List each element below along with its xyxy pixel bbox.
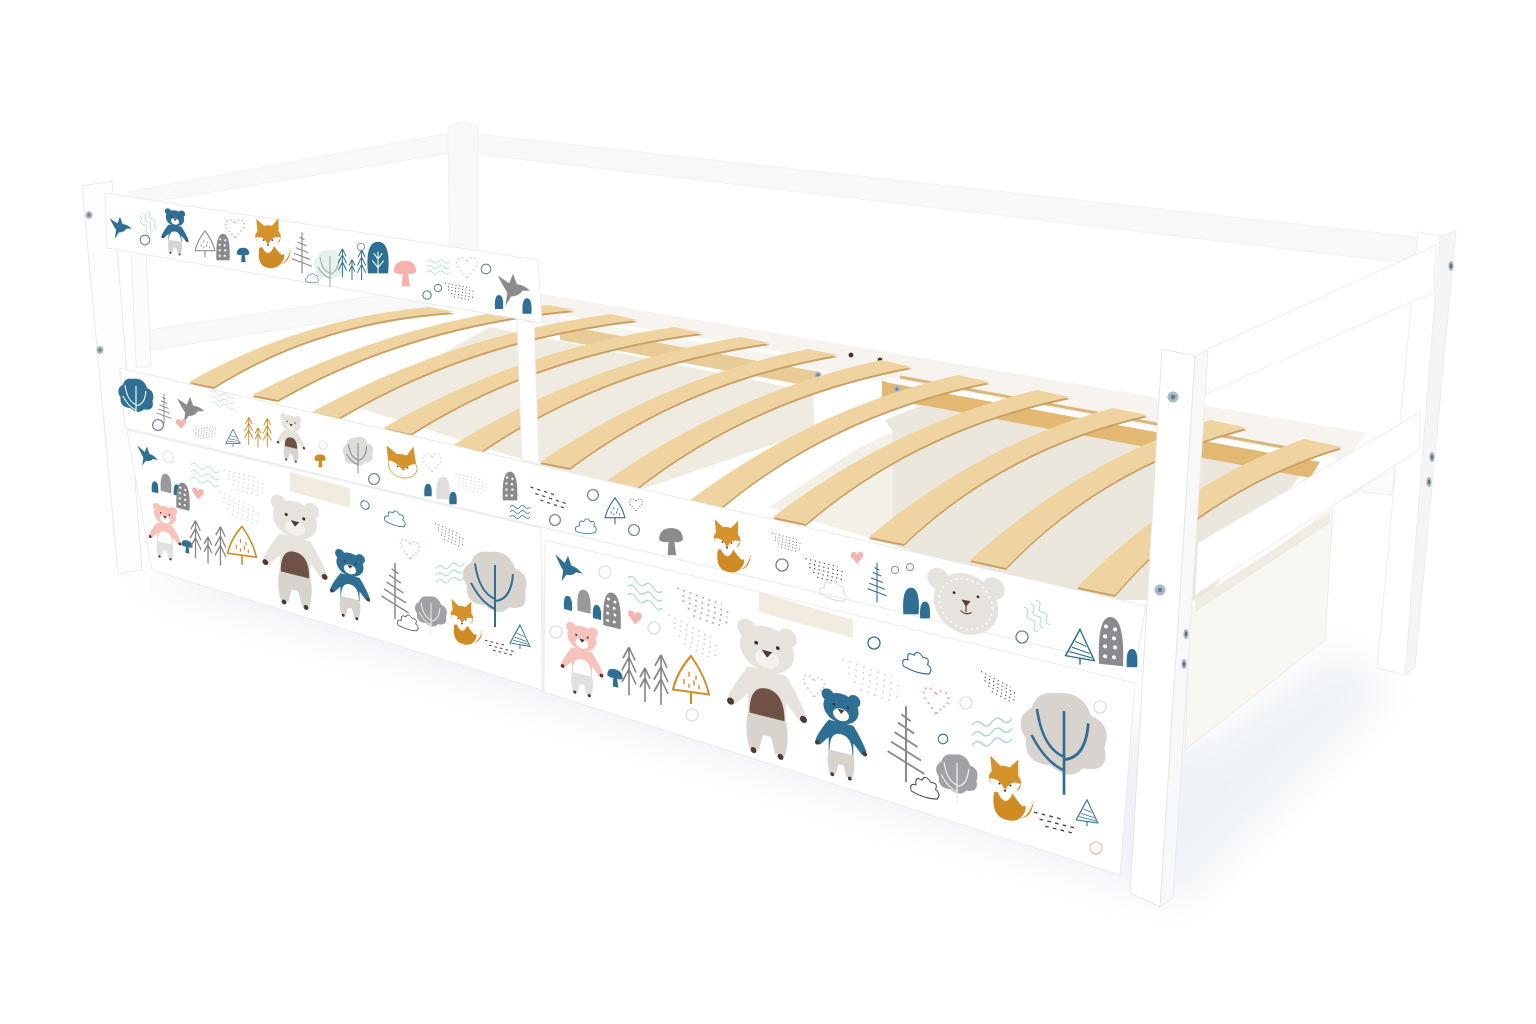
back corner post xyxy=(448,121,478,300)
foot-end lower rail xyxy=(1195,412,1420,595)
beige tree xyxy=(1021,685,1107,802)
head-end front post xyxy=(82,181,142,574)
blue bear xyxy=(815,685,867,785)
front foot post xyxy=(1130,349,1208,907)
decals: left drawer xyxy=(137,444,530,656)
head-end inner strut xyxy=(131,248,151,367)
big grey bear xyxy=(727,614,807,766)
pink bear xyxy=(149,501,181,563)
back side board xyxy=(490,285,1368,460)
head-end upper rail xyxy=(128,133,450,205)
slats xyxy=(189,305,1342,597)
panel: right drawer xyxy=(544,540,1135,875)
panel: front rail with print xyxy=(118,368,1146,668)
slat support ledge xyxy=(560,316,1320,478)
back guard rail xyxy=(467,133,1425,264)
decals: guard rail xyxy=(110,207,532,314)
fox head xyxy=(387,444,417,480)
foot-end upper rail xyxy=(1206,245,1436,394)
blue bear xyxy=(330,547,370,623)
beige tree xyxy=(463,546,527,633)
left drawer fabric box xyxy=(350,327,815,490)
ground shadow xyxy=(135,540,1390,900)
orange tree xyxy=(673,653,709,707)
foot-end post screws xyxy=(1426,261,1454,487)
fox xyxy=(989,754,1034,825)
right drawer fabric box xyxy=(769,403,1303,600)
board holes xyxy=(849,353,882,362)
decals: front rail xyxy=(118,375,1137,667)
guard support strut xyxy=(517,322,539,464)
big grey bear xyxy=(262,491,328,615)
bear face xyxy=(927,566,1005,641)
right drawer side box xyxy=(1185,508,1333,750)
pink bear xyxy=(561,619,603,701)
fox xyxy=(451,598,482,648)
orange tree xyxy=(228,524,256,567)
small grey bear xyxy=(277,411,305,465)
pink mushroom xyxy=(394,261,416,286)
panel: left drawer xyxy=(127,430,542,690)
foot-end back post xyxy=(1377,231,1456,675)
panel: guard rail with print xyxy=(105,193,542,323)
decals: right drawer xyxy=(550,553,1107,854)
sitting fox xyxy=(714,518,751,575)
fir trees xyxy=(190,520,226,567)
post brace xyxy=(1345,468,1395,498)
head-end lower rail xyxy=(149,286,500,350)
ledge screws xyxy=(814,372,900,392)
fir trees xyxy=(622,646,668,706)
striped pine xyxy=(888,702,924,787)
small blue bear xyxy=(161,207,189,257)
blue leaf tree xyxy=(367,242,389,279)
fox xyxy=(255,218,291,268)
